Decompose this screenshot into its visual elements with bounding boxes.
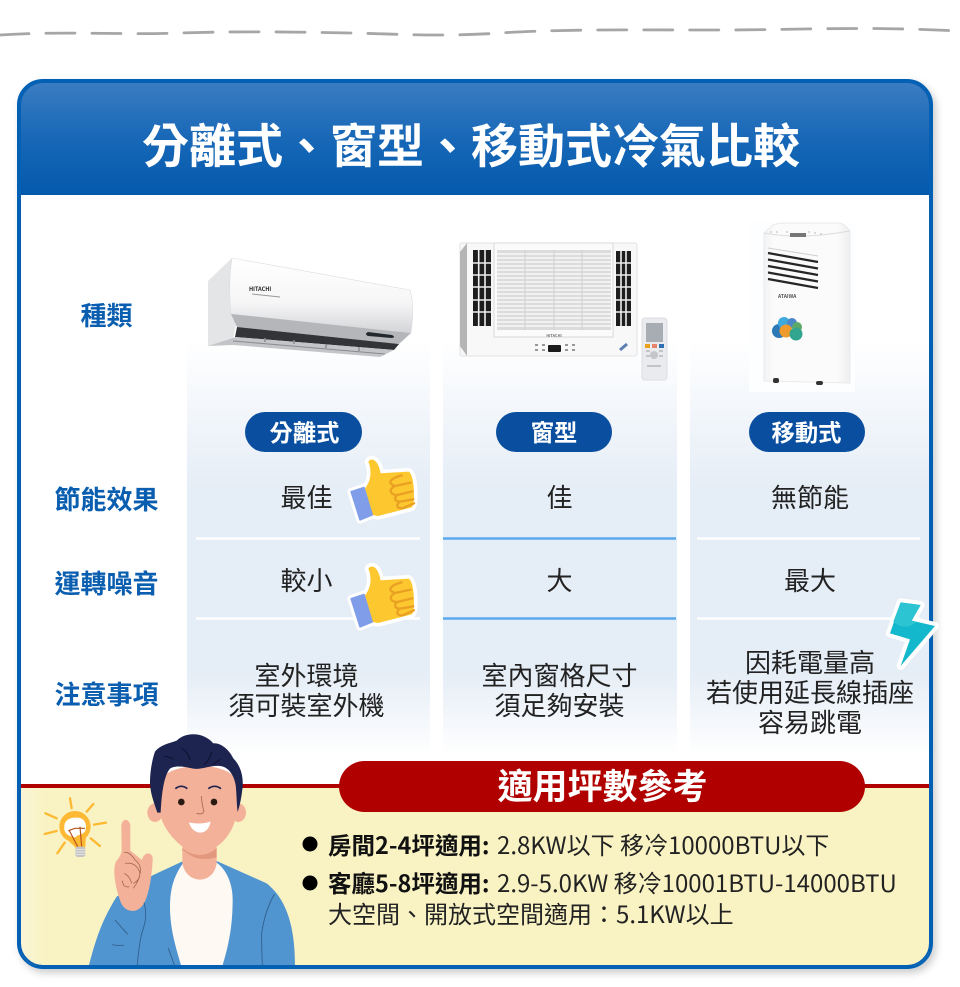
jacket [89,861,295,965]
red divider line [21,784,929,788]
panel: bottom cream area [21,786,929,966]
shirt [170,863,233,965]
icon: light bulb [45,798,106,857]
bullet: open space: 大空間、開放式空間適用：5.1KW以上 [328,895,734,930]
hair [150,734,243,813]
notes: portable: 因耗電量高 [745,643,875,680]
dashed decorative line [0,28,960,35]
type pill: split: 分離式 [270,414,339,448]
row label: noise: 運轉噪音 [54,564,159,601]
ears [147,803,246,822]
row label: type: 種類 [80,296,133,333]
hand [114,820,153,911]
bullet list [302,826,897,930]
noise: window: 大 [546,561,573,598]
type pill: split [245,412,362,452]
icon: lightning bolt [890,602,935,666]
notes: portable: 若使用延長線插座 [706,673,914,710]
notes: split: 室外環境 [254,656,359,693]
product: window air conditioner: HITACHI [546,333,562,339]
panel: title bar background [19,81,931,195]
notes: portable: 容易跳電 [758,703,862,740]
noise: portable: 最大 [784,561,836,598]
face [158,766,238,852]
bullet: living room size: 2.9-5.0KW 移冷10001BTU-14000BTU [497,864,897,899]
heading pill: suitable floor area: 適用坪數參考 [497,759,708,810]
type pill: window [496,412,612,452]
type pill: window: 窗型 [531,414,577,448]
notes: window: 室內窗格尺寸 [481,656,638,693]
title: 分離式、窗型、移動式冷氣比較 [142,108,800,177]
icon: thumbs up (noise) [351,566,414,627]
row label: notes: 注意事項 [54,675,159,712]
energy saving: split: 最佳 [280,478,333,515]
type pill: portable: 移動式 [772,414,841,448]
product: split air conditioner [208,258,413,357]
illustration: man pointing up [89,734,295,965]
bullet: room size: 2.8KW以下 移冷10000BTU以下 [497,826,829,861]
jacket fold lines [112,894,275,965]
energy saving: portable: 無節能 [771,478,849,515]
product: portable air conditioner: ATAIWA [777,293,797,300]
notes: split: 須可裝室外機 [228,686,385,723]
bullet: room size: 房間2-4坪適用: [328,827,490,861]
product: portable air conditioner [749,222,855,392]
column background: split type [187,387,430,730]
type pill: portable [749,412,865,452]
neck [182,843,217,880]
column background: window type [443,387,677,730]
column background: portable type [690,387,929,730]
product: split air conditioner: HITACHI [249,285,271,293]
eyes and brows [175,786,221,814]
product: window air conditioner [460,243,667,380]
energy saving: window: 佳 [546,478,573,515]
icon: thumbs up (energy) [351,459,414,520]
bullet: living room size: 客廳5-8坪適用: [328,865,490,899]
row dividers [196,538,920,618]
noise: split: 較小 [280,561,333,598]
heading pill: suitable floor area [339,759,865,812]
smile [189,822,211,833]
row label: energy saving: 節能效果 [54,480,159,517]
notes: window: 須足夠安裝 [494,686,625,723]
